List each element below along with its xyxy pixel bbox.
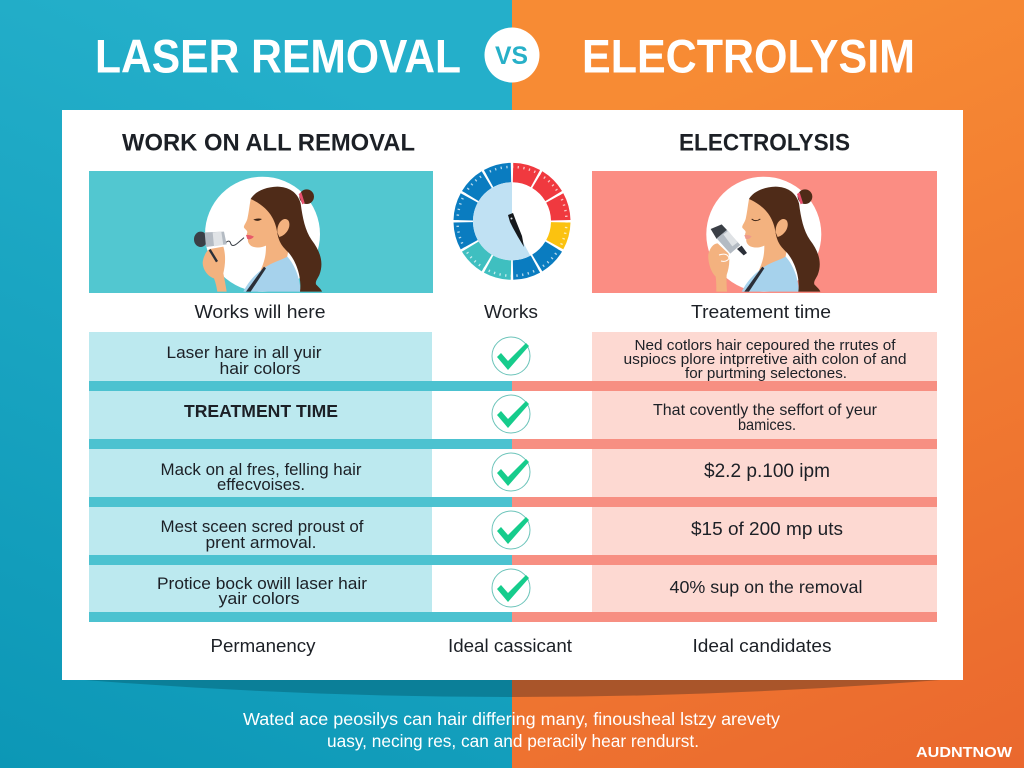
panel: comparison card: [62, 110, 963, 680]
left text: row 4: [160, 518, 364, 552]
left row backgrounds: [89, 332, 432, 614]
footer label: ideal candidates: Ideal candidates: [692, 636, 832, 656]
right text: row 4: $15 of 200 mp uts: [691, 519, 843, 539]
panel shadow: [85, 680, 940, 697]
footer label: permanency: Permanency: [210, 636, 316, 656]
left text: row 5: yair colors: [218, 590, 300, 608]
left text: row 4: prent armoval.: [206, 534, 316, 552]
right text: row 1: for purtming selectones.: [685, 365, 847, 382]
caption: [243, 709, 780, 751]
right text: row 2: bamices.: [738, 417, 796, 434]
heading: left column: WORK ON ALL REMOVAL: [122, 130, 415, 156]
heading: right column: ELECTROLYSIS: [679, 130, 850, 156]
left text: row 2: TREATMENT TIME: [184, 401, 338, 421]
right text: row 1: uspiocs plore intprretive aith colon of and: [624, 351, 906, 368]
right text: row 5: 40% sup on the removal: [670, 577, 862, 597]
vs badge: VS: [495, 42, 528, 70]
left text: row 3: Mack on al fres, felling hair: [160, 461, 362, 479]
left text: row 5: [157, 575, 368, 608]
column label: works will here: Works will here: [194, 302, 326, 322]
title: laser removal: LASER REMOVAL: [95, 30, 461, 82]
vs badge: [484, 28, 540, 82]
left text: row 1: Laser hare in all yuir: [166, 344, 322, 362]
teal row dividers: [89, 381, 512, 622]
right text: row 2: [653, 402, 878, 434]
background: teal half: [0, 0, 512, 768]
caption: Wated ace peosilys can hair differing many, finousheal lstzy arevety: [243, 709, 780, 729]
gauge: [458, 167, 566, 276]
left text: row 4: Mest sceen scred proust of: [160, 518, 364, 536]
left text: row 5: Protice bock owill laser hair: [157, 575, 368, 593]
illustration: woman with electrolysis device: [592, 171, 937, 293]
left text: row 3: [160, 461, 362, 494]
left text: row 1: hair colors: [220, 360, 300, 378]
right text: row 3: $2.2 p.100 ipm: [704, 461, 830, 482]
left text: row 3: effecvoises.: [217, 476, 305, 494]
right row backgrounds: [592, 332, 937, 614]
left text: row 1: [166, 344, 322, 378]
right text: row 1: [624, 337, 906, 382]
column label: treatement time: Treatement time: [691, 302, 831, 322]
brand mark: AUDNTNOW: [916, 744, 1013, 761]
coral row dividers: [512, 381, 937, 622]
footer label: ideal cassicant: Ideal cassicant: [448, 636, 572, 656]
background: orange half: [512, 0, 1024, 768]
column label: works: Works: [484, 302, 538, 322]
title: electrolysim: ELECTROLYSIM: [582, 30, 915, 82]
right text: row 1: Ned cotlors hair cepoured the rrutes of: [634, 337, 896, 354]
right text: row 2: That covently the seffort of yeur: [653, 402, 878, 419]
check mark icons: [492, 337, 530, 607]
caption: uasy, necing res, can and peracily hear rendurst.: [327, 731, 699, 751]
illustration: woman with laser device: [89, 171, 433, 293]
